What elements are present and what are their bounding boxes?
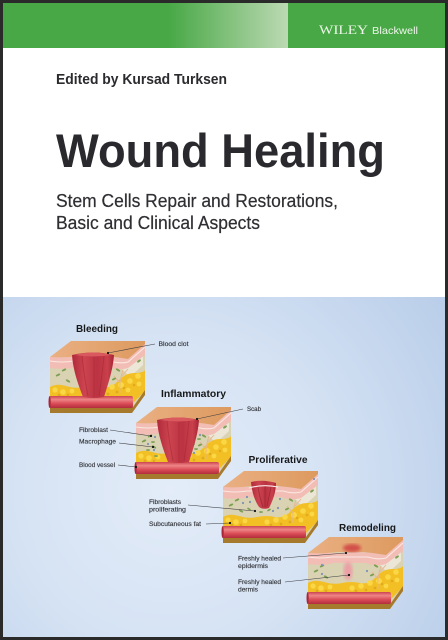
block illustration: proliferative: [222, 471, 318, 543]
title: Wound Healing: [56, 124, 385, 177]
label: scab: Scab: [247, 406, 261, 413]
publisher logo: Wiley Blackwell: WILEY: [319, 22, 369, 37]
label: scab: [196, 406, 261, 420]
label: subcutaneous fat: [149, 521, 231, 528]
block illustration: bleeding: [48, 341, 145, 413]
publisher logo: Wiley Blackwell: [319, 22, 418, 37]
label: macrophage: Macrophage: [79, 438, 116, 446]
label: blood vessel: [79, 462, 137, 469]
label: freshly healed epidermis: epidermis: [238, 563, 269, 570]
heading: bleeding: Bleeding: [76, 323, 118, 335]
label: blood vessel: Blood vessel: [79, 462, 115, 469]
label: fibroblasts proliferating: [149, 499, 256, 514]
editor credit: Edited by Kursad Turksen: [56, 72, 227, 88]
label: freshly healed epidermis: [238, 552, 347, 570]
healed scar on surface: [343, 544, 361, 552]
label: blood clot: Blood clot: [158, 341, 189, 348]
heading: remodeling: Remodeling: [339, 522, 396, 534]
label: blood clot: [107, 341, 189, 354]
stage: bleeding: [48, 323, 189, 413]
stage: proliferative: [149, 454, 318, 543]
label: fibroblasts proliferating: proliferating: [149, 506, 186, 514]
block illustration: remodeling: [306, 537, 403, 609]
subtitle: [56, 191, 338, 233]
stage: remodeling: [238, 522, 403, 609]
label: macrophage: [79, 438, 154, 448]
healed dermis patch: [344, 562, 352, 580]
label: fibroblasts proliferating: Fibroblasts: [149, 499, 182, 506]
label: fibroblast: Fibroblast: [79, 427, 108, 434]
label: freshly healed dermis: [238, 574, 350, 594]
label: subcutaneous fat: Subcutaneous fat: [149, 521, 201, 528]
label: freshly healed dermis: dermis: [238, 586, 259, 594]
label: fibroblast: [79, 427, 152, 437]
label: freshly healed dermis: Freshly healed: [238, 579, 281, 586]
heading: proliferative: Proliferative: [248, 454, 308, 466]
heading: inflammatory: Inflammatory: [161, 388, 226, 400]
subtitle: Stem Cells Repair and Restorations,: [56, 191, 338, 211]
label: freshly healed epidermis: Freshly healed: [238, 556, 281, 562]
small closing wound: [251, 481, 276, 509]
subtitle: Basic and Clinical Aspects: [56, 213, 260, 233]
publisher logo: Wiley Blackwell: Blackwell: [372, 25, 418, 37]
panel: green header band: [3, 3, 445, 48]
stage: inflammatory: [79, 388, 261, 479]
block illustration: inflammatory: [134, 407, 231, 479]
panel: illustration background: [3, 297, 445, 637]
